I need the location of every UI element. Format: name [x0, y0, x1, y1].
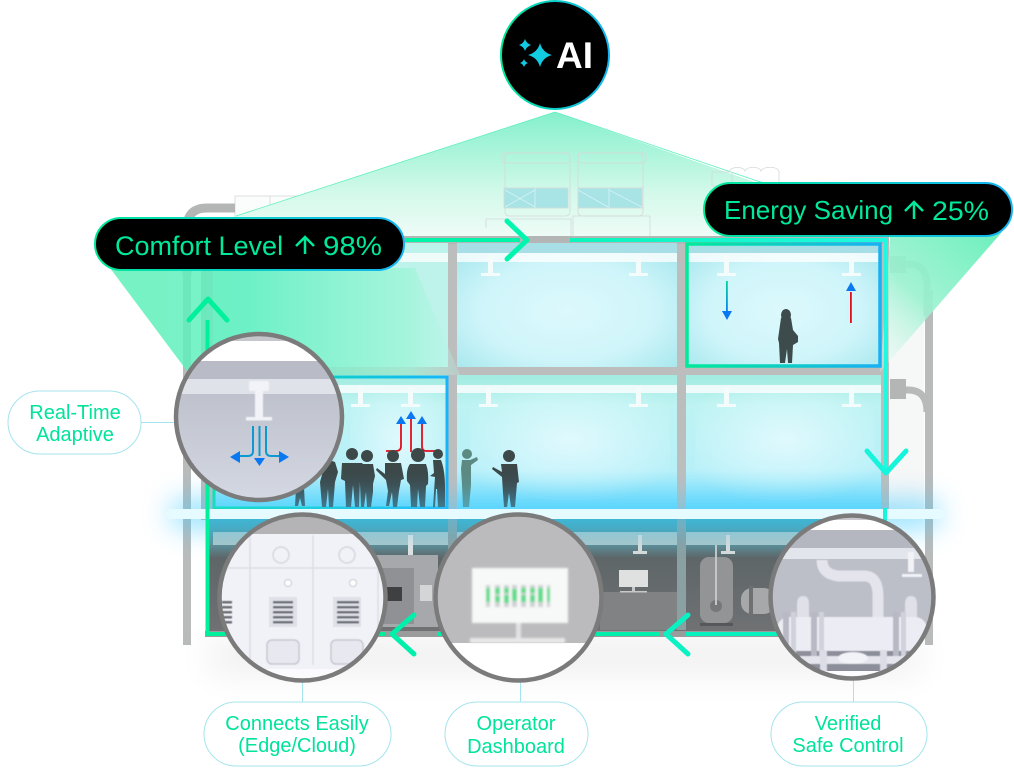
basement [205, 518, 887, 637]
airflow arrows: crowd room [386, 411, 436, 452]
connector lines [141, 422, 854, 702]
icon: up arrow [905, 202, 923, 219]
callout: Comfort Level: Comfort Level [115, 231, 283, 261]
magnifier rim [176, 334, 342, 500]
rooftop equipment [486, 153, 779, 240]
magnifier: controllers [215, 510, 390, 689]
AI badge: AI [556, 35, 593, 76]
label: Verified Safe Control: Verified [815, 713, 881, 735]
magnifier rim [436, 514, 602, 680]
magnifier: heat exchanger [765, 510, 940, 685]
rooftop box [235, 196, 334, 218]
label: Real-Time Adaptive: Adaptive [36, 424, 114, 446]
basement equipment: tank and pump [700, 535, 775, 626]
people outside the room [461, 449, 519, 507]
magnifier rim [220, 514, 386, 680]
magnifier: air diffuser [170, 330, 350, 505]
control loop line [208, 240, 886, 634]
ceiling strips [213, 253, 881, 393]
callout: Comfort Level [95, 218, 404, 270]
crowd silhouettes [295, 448, 445, 507]
magnifier rim [770, 516, 934, 678]
label: Operator Dashboard: Dashboard [467, 736, 565, 758]
light cone from AI [215, 112, 900, 245]
label: Verified Safe Control [771, 702, 927, 766]
icon: sparkles [519, 39, 552, 67]
arrow: roof chevron [507, 221, 527, 259]
callout: Energy Saving: Energy Saving [724, 195, 893, 225]
ceiling units [351, 255, 861, 407]
glowing floor band [166, 500, 944, 528]
label: Verified Safe Control: Safe Control [792, 735, 904, 757]
person: single in top right room [778, 309, 798, 363]
arrow: bottom chevron right [666, 615, 688, 654]
AI badge [501, 1, 609, 109]
icon: up arrow [296, 237, 314, 254]
callout: Energy Saving: 25% [932, 196, 989, 226]
right green cone overlay [880, 232, 1002, 372]
right side ducts [888, 256, 927, 518]
magnifier: operator dashboard [430, 510, 610, 688]
arrow: right chevron [867, 451, 906, 473]
label: Real-Time Adaptive [8, 391, 141, 454]
ground shadow [210, 640, 920, 672]
building outer walls [183, 270, 933, 645]
basement equipment: cabinets [376, 535, 438, 627]
left duct [187, 208, 235, 275]
callout: Energy Saving [704, 183, 1012, 236]
label: Operator Dashboard [445, 702, 588, 766]
label: Operator Dashboard: Operator [477, 713, 556, 735]
label: Connects Easily: Connects Easily [225, 713, 369, 735]
room outline: middle left [214, 377, 447, 508]
airflow arrows: top right room [722, 281, 856, 323]
rooms [213, 243, 881, 510]
label: Real-Time Adaptive: Real-Time [29, 402, 121, 424]
arrow: left chevron [189, 299, 227, 320]
diffuser airflow arrows [230, 426, 289, 466]
arrow: bottom chevron left [392, 615, 414, 654]
room outline: top right [687, 244, 880, 366]
label: Connects Easily [204, 702, 391, 766]
structure: roof, slabs and columns [205, 236, 889, 518]
left green cone overlay [110, 268, 460, 375]
label: Connects Easily: (Edge/Cloud) [238, 735, 356, 757]
basement equipment: monitor [619, 535, 648, 592]
callout: Comfort Level: 98% [323, 231, 382, 261]
